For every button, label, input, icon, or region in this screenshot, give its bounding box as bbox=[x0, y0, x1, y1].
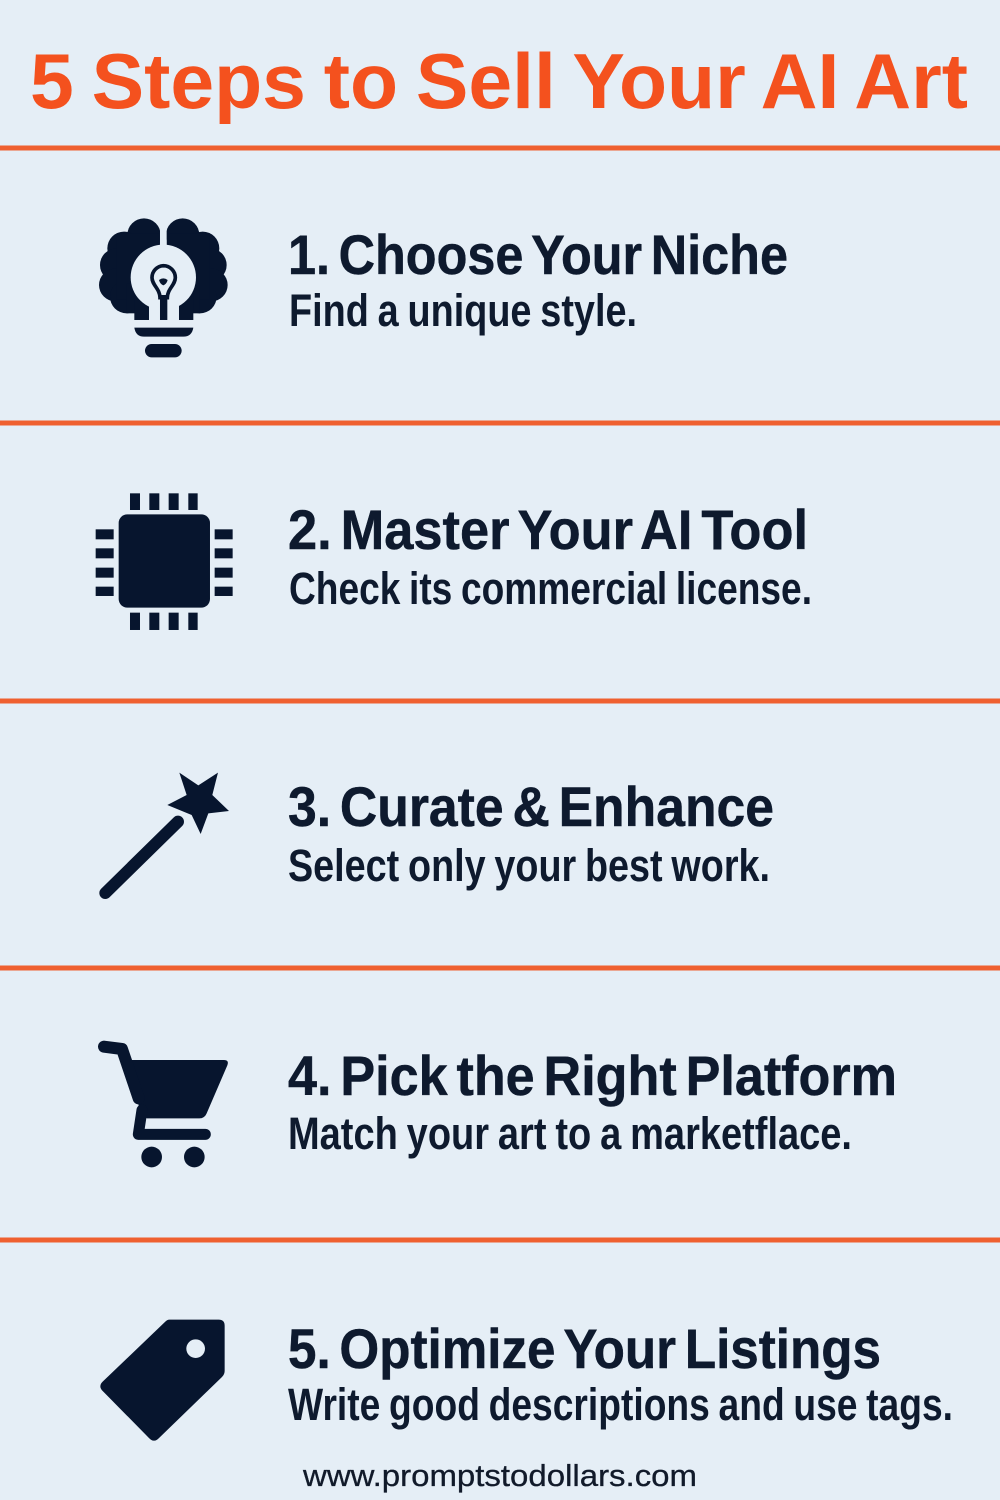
heading: step 1: 1. Choose Your Niche bbox=[288, 223, 788, 286]
heading: step 3: 3. Curate & Enhance bbox=[288, 775, 774, 838]
icon: price tag bbox=[100, 1320, 225, 1441]
text: step 1 description: Find a unique style. bbox=[289, 285, 637, 336]
icon: magic wand bbox=[105, 773, 229, 893]
icon: brain light bulb bbox=[99, 217, 228, 357]
icon: microchip bbox=[96, 493, 233, 630]
panel: step 5 bbox=[100, 1317, 953, 1441]
panel: step 4 bbox=[104, 1044, 897, 1167]
panel: step 3 bbox=[105, 773, 774, 893]
panel: step 2 bbox=[96, 493, 812, 630]
heading: step 5: 5. Optimize Your Listings bbox=[288, 1317, 881, 1380]
text: step 3 description: Select only your best work. bbox=[288, 840, 770, 891]
panel: step 1 bbox=[99, 217, 788, 357]
title: 5 Steps to Sell Your AI Art bbox=[30, 37, 968, 125]
text: step 4 description: Match your art to a marketflace. bbox=[288, 1108, 852, 1159]
heading: step 4: 4. Pick the Right Platform bbox=[288, 1044, 897, 1107]
text: step 2 description: Check its commercial license. bbox=[289, 563, 812, 614]
footer url: www.promptstodollars.com bbox=[302, 1458, 697, 1493]
icon: shopping cart bbox=[104, 1047, 228, 1167]
heading: step 2: 2. Master Your AI Tool bbox=[288, 498, 808, 561]
